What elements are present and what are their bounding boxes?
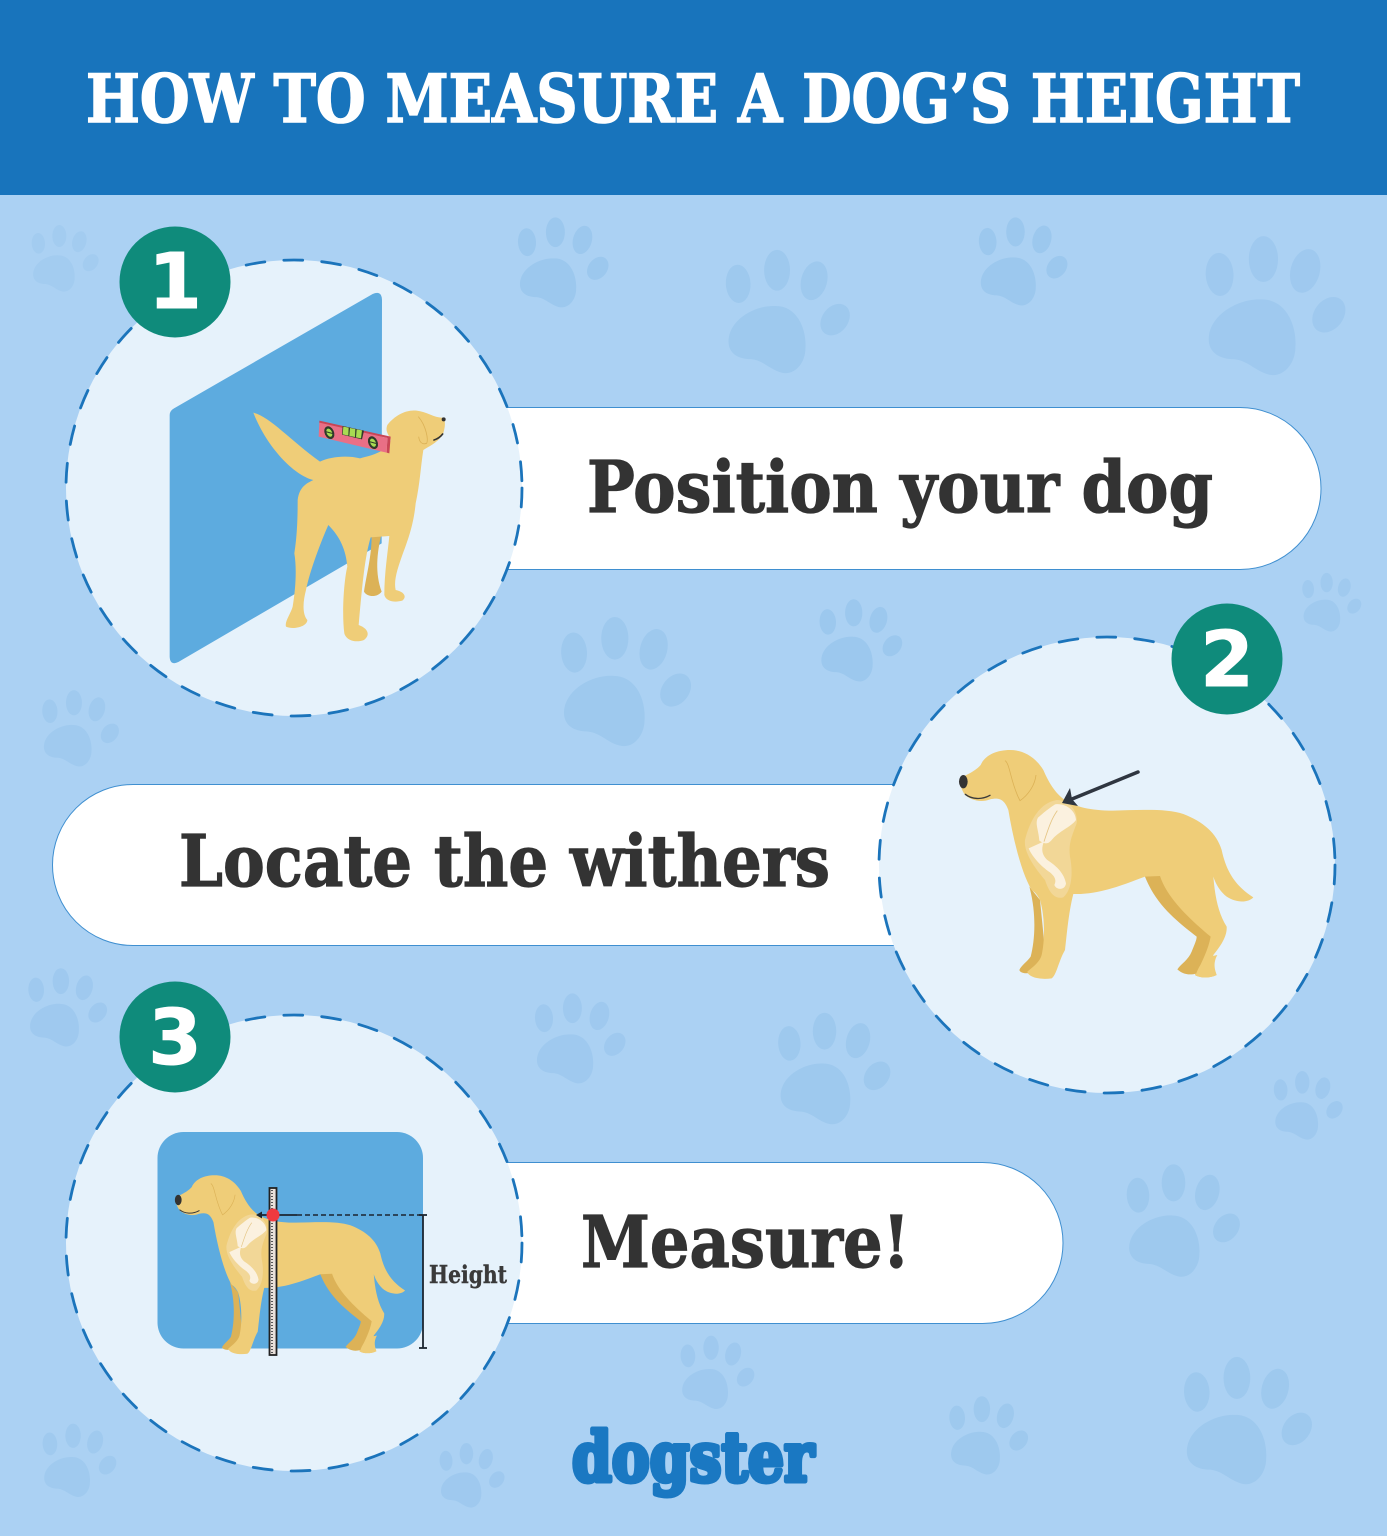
height label: Height	[429, 1260, 507, 1289]
spirit level	[319, 421, 391, 453]
arrow to withers	[1062, 772, 1138, 806]
number badge 3: 3	[148, 994, 202, 1083]
label text: step 2: Locate the withers	[179, 819, 830, 903]
label text: step 3: Measure!	[581, 1200, 910, 1284]
ruler	[270, 1188, 276, 1355]
header band	[0, 0, 1387, 195]
dashed circle: step 2	[879, 637, 1335, 1093]
label pill: step 2	[52, 784, 1102, 946]
number badge 3	[120, 982, 230, 1092]
label text: step 1: Position your dog	[587, 445, 1213, 529]
label pill: step 1	[300, 408, 1321, 570]
illustration: dog side view measured	[175, 1175, 405, 1354]
number badge 1: 1	[148, 238, 202, 327]
measurement guide line	[256, 1212, 423, 1218]
wall	[170, 293, 382, 663]
dogster logo: dogster	[572, 1418, 815, 1498]
backdrop panel	[158, 1132, 423, 1348]
dog body	[253, 410, 445, 641]
number badge 2: 2	[1200, 616, 1254, 705]
panel: step 1 position your dog	[66, 226, 1321, 716]
panel: step 2 locate the withers	[52, 604, 1335, 1093]
number badge 1	[120, 226, 230, 338]
height bracket	[419, 1215, 427, 1348]
number badge 2	[1172, 604, 1282, 714]
dog face details	[418, 417, 446, 444]
dashed circle: step 1	[66, 260, 522, 716]
far leg	[364, 533, 382, 596]
illustration: dog side view	[959, 750, 1253, 979]
panel: step 3 measure	[66, 982, 1063, 1471]
illustration: dog against wall with level	[170, 293, 446, 663]
dashed circle: step 3	[66, 1015, 522, 1471]
label pill: step 3	[300, 1162, 1063, 1324]
red marker dot	[266, 1208, 280, 1222]
